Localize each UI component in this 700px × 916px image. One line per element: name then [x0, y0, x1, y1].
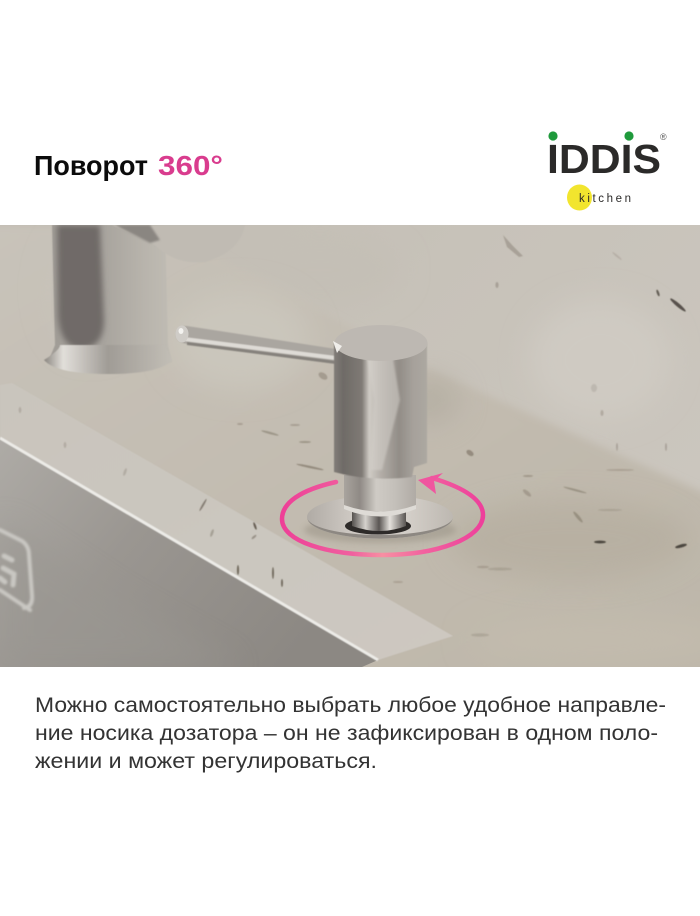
- counter front face: [0, 383, 453, 660]
- sink: [0, 438, 378, 667]
- body text: Можно самостоятельно выбрать любое удобное направле-: [35, 693, 666, 717]
- flange lower rim: [308, 520, 452, 538]
- sink brushed shading: [0, 520, 240, 667]
- counter speckles: [237, 371, 687, 637]
- lower neck: [352, 511, 406, 531]
- stone wall: [0, 225, 700, 496]
- sink brand plate: [0, 530, 32, 610]
- spout underside: [187, 342, 336, 364]
- faucet arm: [114, 226, 122, 230]
- title: 360°: [158, 150, 223, 181]
- front face speckles: [19, 407, 283, 587]
- spout highlight: [184, 337, 336, 360]
- cap highlight: [333, 341, 342, 353]
- faucet dark reflection: [57, 225, 104, 349]
- body text: [35, 693, 666, 773]
- title: [34, 150, 223, 181]
- dispenser: [176, 325, 456, 543]
- faucet base: [44, 345, 172, 374]
- logo: IDDIS kitchen: [547, 131, 667, 210]
- wall texture: [495, 236, 686, 451]
- rotation arrow: [282, 473, 483, 555]
- sink bright rim: [0, 438, 378, 660]
- arc: [282, 478, 483, 555]
- chrome ring: [344, 504, 416, 516]
- logo yellow spot: [567, 184, 592, 210]
- upper neck: [344, 475, 416, 512]
- flange dark hole: [345, 520, 411, 534]
- body reflection: [373, 360, 400, 470]
- spout: [176, 326, 336, 364]
- back faucet: [44, 225, 245, 374]
- logo kitchen word: kitchen: [579, 193, 631, 205]
- body text: ние носика дозатора – он не зафиксирован в одном поло-: [35, 721, 658, 745]
- contact shadow: [304, 524, 456, 544]
- countertop: [218, 386, 700, 667]
- photo: dispenser on stone countertop: [0, 225, 700, 690]
- flange: [307, 496, 453, 538]
- logo green dots: [548, 131, 634, 141]
- faucet body: [50, 225, 168, 356]
- body cylinder: [334, 343, 427, 479]
- logo registered mark: ®: [660, 132, 667, 142]
- counter shading: [206, 330, 668, 566]
- top cap: [334, 325, 428, 361]
- body text: жении и может регулироваться.: [35, 749, 377, 773]
- arrowhead: [418, 473, 443, 494]
- title: Поворот: [34, 150, 148, 181]
- logo wordmark: IDDIS: [547, 136, 661, 182]
- spout ball tip: [176, 326, 188, 342]
